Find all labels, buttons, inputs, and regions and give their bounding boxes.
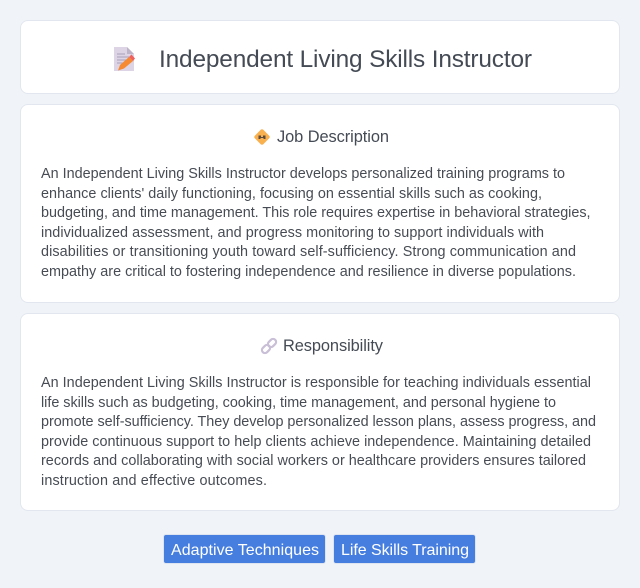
text block: job description: enhance clients' daily functioning, focusing on essential skills such as cooking, [41, 186, 542, 202]
text block: job description: individualized assessment, and progress monitoring to support individuals with [41, 225, 544, 241]
tag: adaptive techniques: Adaptive Techniques [171, 542, 319, 559]
panel: responsibility [20, 313, 620, 511]
heading: job description: Job Description [277, 128, 389, 146]
panel: header [20, 20, 620, 94]
text block: responsibility: life skills such as budgeting, cooking, time management, and personal hygiene to [41, 395, 556, 411]
icon: orange diamond sign [254, 129, 270, 145]
text block: job description: budgeting, and time management. This role requires expertise in behavioral strategies, [41, 205, 590, 221]
icon: chain link [260, 338, 278, 354]
text block: job description: disabilities or transitioning youth toward self-sufficiency. Strong communication and [41, 244, 576, 260]
text block: responsibility [41, 375, 596, 489]
title: Independent Living Skills Instructor [159, 46, 532, 73]
text block: responsibility: promote self-sufficiency. They develop personalized lesson plans, assess progress, and [41, 414, 596, 430]
tag: life skills training [333, 534, 476, 564]
panel: job description [20, 104, 620, 303]
text block: responsibility: instruction and effective outcomes. [41, 473, 267, 489]
text block: job description [41, 166, 590, 280]
icon: document with pencil [114, 47, 135, 71]
text block: responsibility: records and collaborating with social workers or healthcare providers ensures tailored [41, 453, 586, 469]
tag: life skills training: Life Skills Training [341, 542, 469, 559]
tag: adaptive techniques [163, 534, 326, 564]
heading: responsibility: Responsibility [283, 337, 384, 355]
text block: responsibility: provide continuous support to help clients achieve independence. Maintaining detailed [41, 434, 591, 450]
text block: job description: An Independent Living Skills Instructor develops personalized training programs to [41, 166, 565, 182]
text block: responsibility: An Independent Living Skills Instructor is responsible for teaching individuals essential [41, 375, 591, 391]
text block: job description: empathy are critical to fostering independence and resilience in diverse populations. [41, 264, 576, 280]
